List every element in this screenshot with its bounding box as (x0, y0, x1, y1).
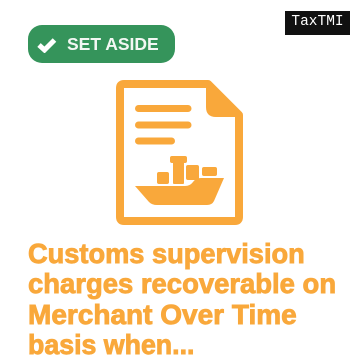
icon: check mark (37, 38, 56, 53)
badge: set aside (28, 25, 175, 63)
headline line 2: charges recoverable on (28, 268, 336, 299)
logo: TaxTMI: TaxTMI (291, 14, 344, 30)
document outline (120, 84, 239, 221)
logo: TaxTMI (285, 11, 350, 35)
icon: document with cargo ship (116, 80, 243, 225)
badge label: SET ASIDE (67, 34, 159, 54)
headline line 1: Customs supervision (28, 238, 305, 269)
headline line 3: Merchant Over Time (28, 299, 297, 330)
cargo ship (135, 156, 224, 205)
headline line 4: basis when... (28, 329, 194, 360)
text lines (138, 108, 188, 141)
